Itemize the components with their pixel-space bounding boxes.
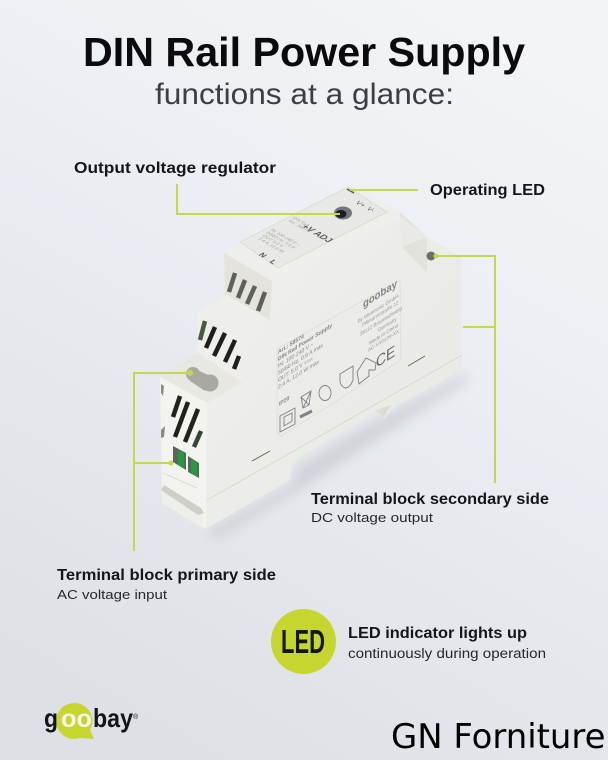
main side face [206,212,462,529]
callout line: output voltage regulator [177,184,340,214]
label: terminal block secondary side: Terminal block secondary side [311,491,549,508]
label: operating LED: Operating LED [430,182,545,199]
logo: goobay: oo [61,705,92,733]
logo: goobay: bay [93,703,133,733]
top markings: IN: 100-240 V ~ [269,228,302,247]
label: output voltage regulator: Output voltage regulator [74,160,276,177]
label text right: 38112 Braunschweig [360,306,402,338]
LED indicator text: LED indicator lights up [348,625,527,642]
label: terminal block secondary side: DC voltage output [311,510,433,525]
logo: goobay: g [44,703,58,733]
icon: LED badge [271,609,336,674]
label: terminal block primary side: Terminal block primary side [57,567,276,584]
callout line: terminal block primary side [134,370,193,551]
label text right: by Wentronic GmbH [358,293,399,325]
top markings [256,201,377,265]
rear screw hole [426,252,436,260]
top markings: V- [364,207,377,214]
label: terminal block primary side [57,567,276,602]
tier 2 top face [197,295,270,340]
device shadow [207,373,470,540]
rear block top [427,237,462,273]
mounting keyhole [186,367,218,392]
label text right [358,277,402,354]
logo: goobay: ® [133,713,139,721]
tier 3 top face [160,353,242,403]
top markings: OUT: 5.0 V [261,234,286,248]
LED indicator text: continuously during operation [348,646,546,661]
callout line: terminal block secondary side [434,254,495,483]
device: DIN rail power supply [160,185,470,540]
label text left: Art.: 58574 [278,333,304,356]
callout line: operating LED [350,189,418,191]
tier 3 vents [161,384,201,447]
tier 2 front with vents [197,312,242,383]
top face [222,185,402,282]
foot notch [375,405,391,417]
tier 3 front face [160,377,207,529]
compliance icons [280,358,376,432]
label text left: 50/60 Hz, 0.6 A max [278,343,323,377]
label text left: DIN Rail Power Supply [278,323,333,363]
label text left: IN: 100-240 V ~ [278,341,314,370]
label text left: IP20 [279,395,290,408]
top markings: Art.: 58574 [287,219,311,233]
CE mark: CE [376,342,395,372]
top markings: V+ [353,201,367,208]
label text right: goobay [363,277,398,311]
label text left: OUT: 5.0 V === [278,356,313,384]
subtitle: functions at a glance: [155,78,454,111]
label text right: AC-V10124-XX [368,328,399,354]
icon: LED badge: LED [281,623,325,660]
label: terminal block secondary side [311,491,549,525]
rear notch [400,212,427,273]
logo: goobay [44,703,139,739]
top markings: DIN Rail [291,216,310,227]
top markings: +V ADJ [299,223,335,244]
green terminal connectors [173,446,199,478]
label text right: Germany [378,316,397,334]
top label plate [240,187,387,268]
watermark: GN Forniture [391,717,605,756]
adjust potentiometer hole [334,206,352,220]
top markings: 50/60 Hz, 0.6 A [265,231,298,250]
label text right: Made in China [369,323,398,347]
operating LED window [347,189,354,193]
bottom clip [161,485,204,528]
top markings: L [267,259,279,265]
label: terminal block primary side: AC voltage input [57,587,167,602]
label text left: 2.4 A, 12.0 W max [278,359,319,391]
label text right: Pillmannstraße 12 [362,300,398,329]
label text left [278,323,333,408]
top markings: N [256,252,269,259]
tier 1 front with vents [224,253,272,321]
LED indicator text [348,625,546,661]
lower edge seam [163,355,462,500]
top markings: 2.4 A, 12.0 W [257,237,286,254]
title: DIN Rail Power Supply [83,29,525,75]
vent slot marks [252,356,425,461]
product label [277,277,402,436]
